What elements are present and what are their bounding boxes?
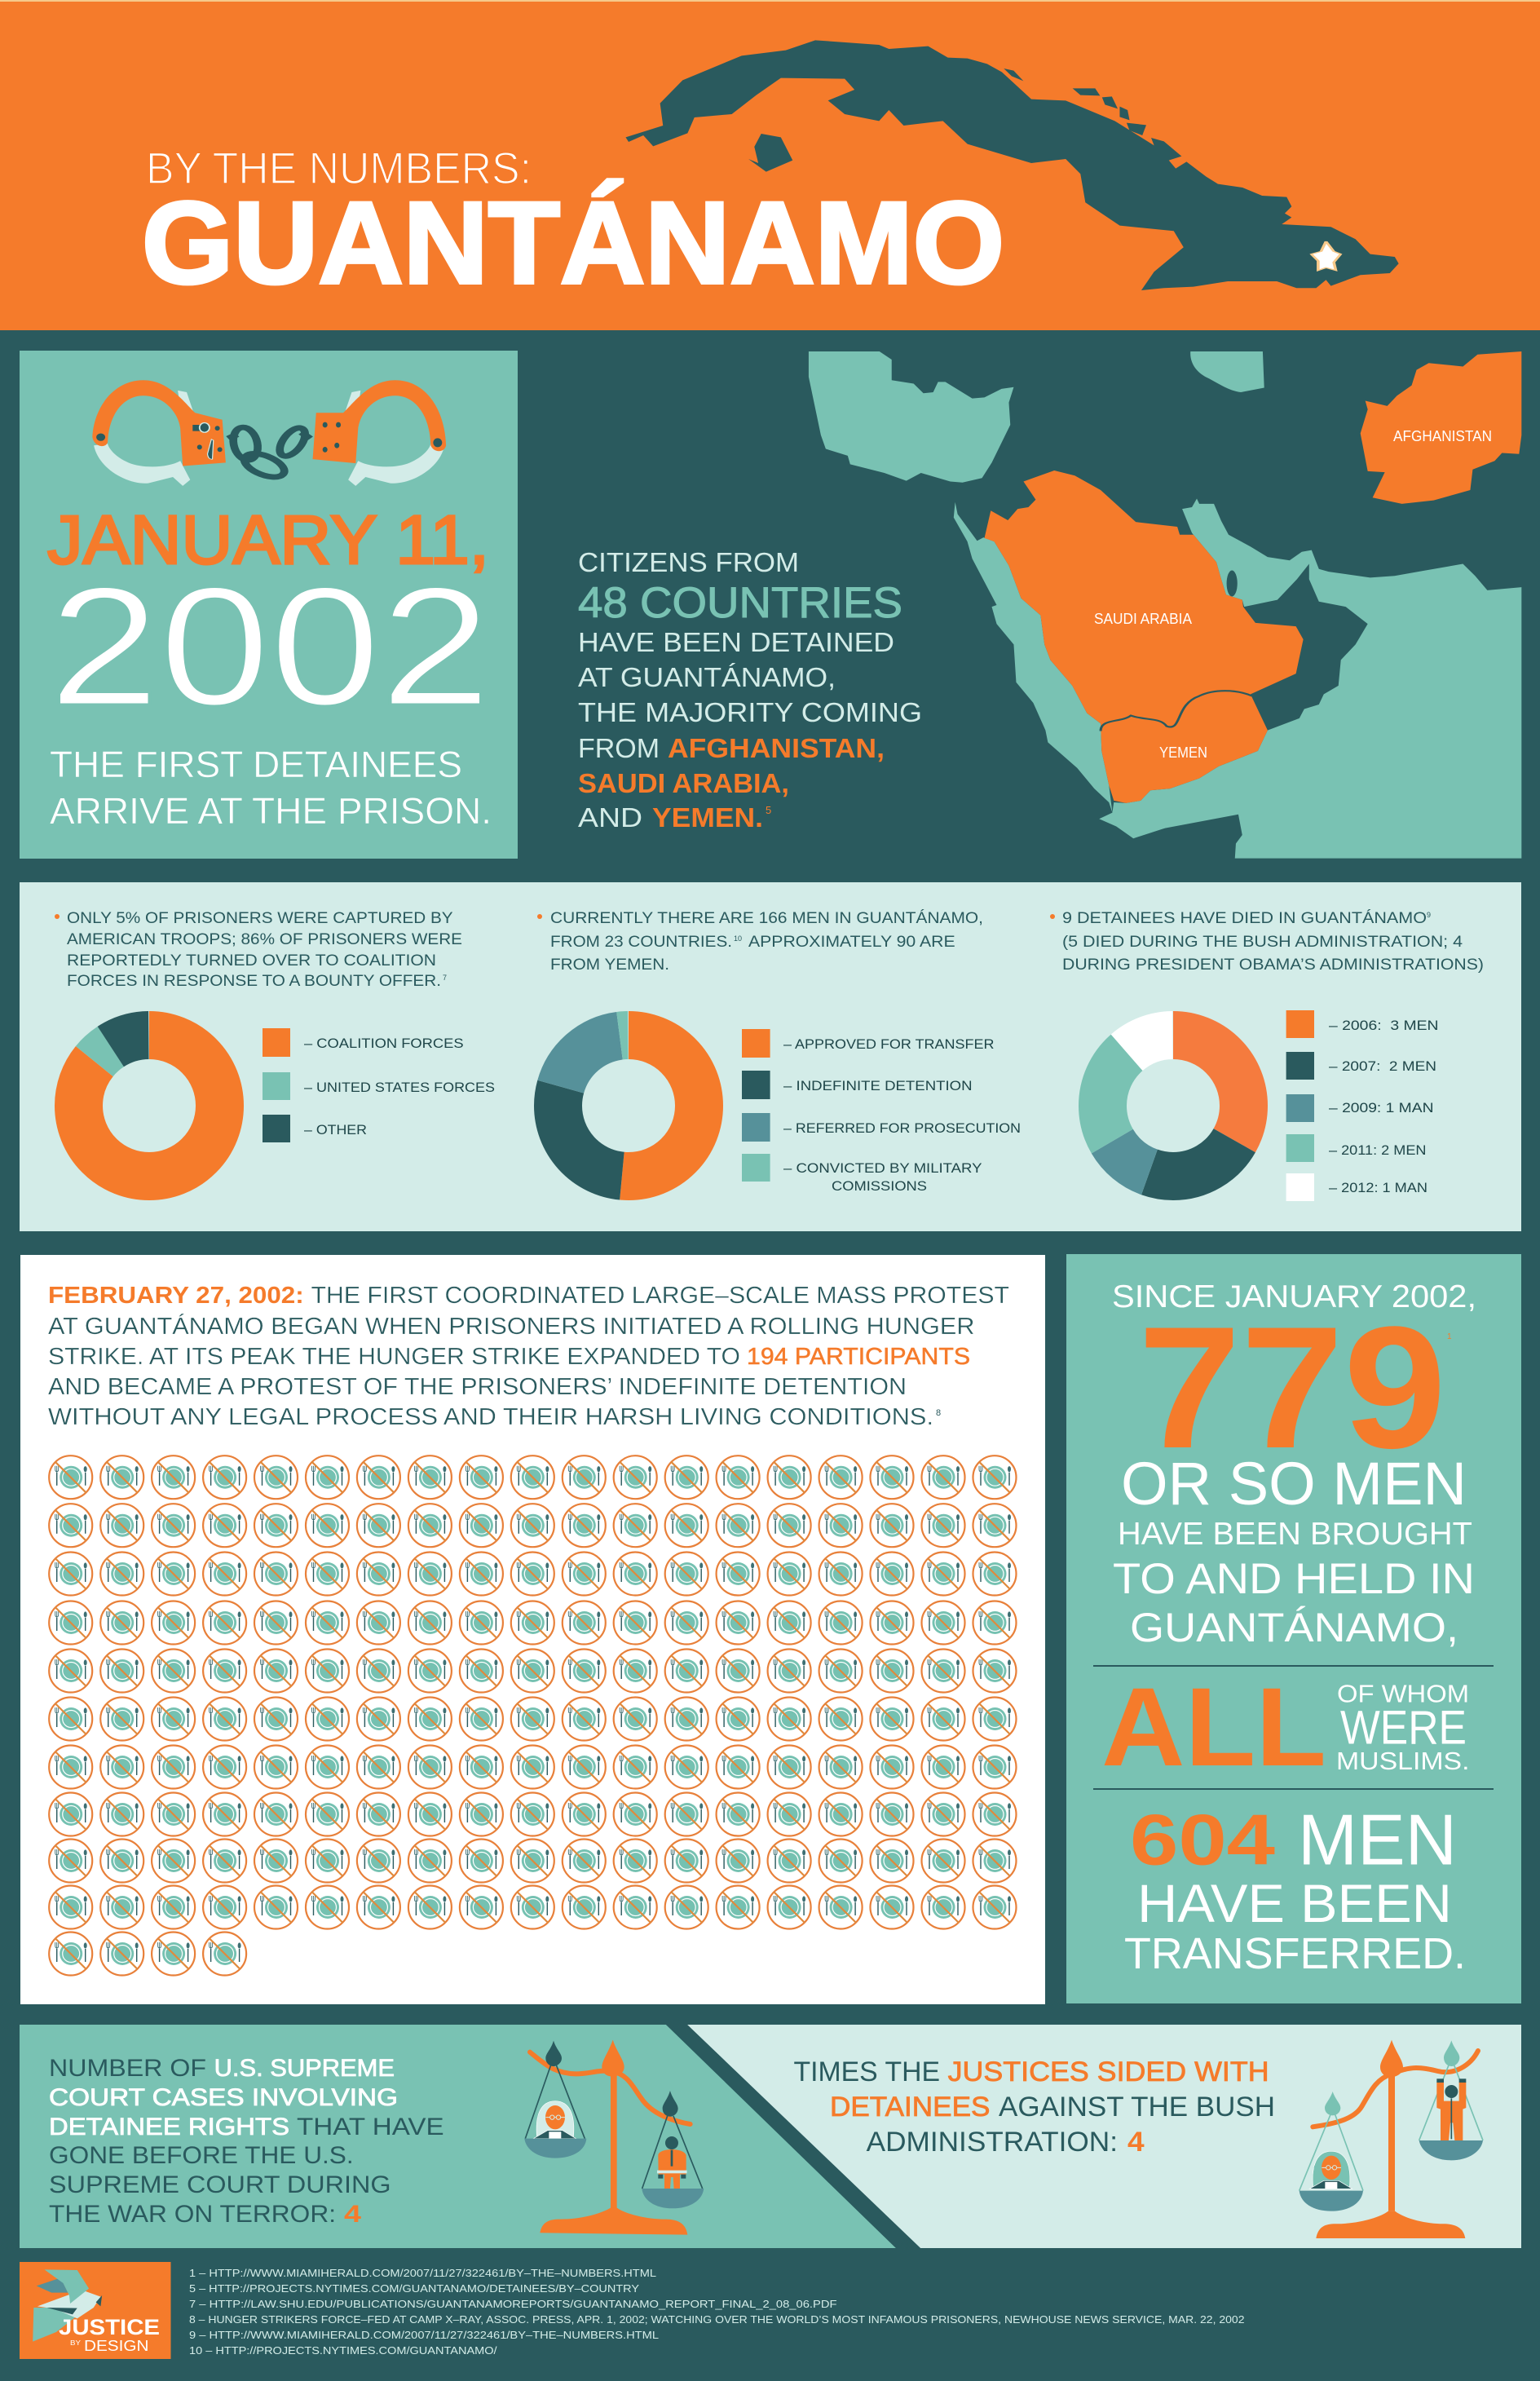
text: hunger strike description: AT GUANTÁNAMO BEGAN WHEN PRISONERS INITIATED A ROLLING HUNGER [48, 1314, 975, 1340]
text: number of Supreme Court cases: COURT CASES INVOLVING [49, 2084, 398, 2111]
text: all of whom were Muslims [1101, 1665, 1469, 1790]
text: capture statistics: FORCES IN RESPONSE TO A BOUNTY OFFER. [67, 972, 441, 990]
text: number of Supreme Court cases: GONE BEFORE THE U.S. [49, 2142, 354, 2169]
legend: deaths by year: – 2009: 1 MAN [1329, 1100, 1433, 1115]
text block: citizens from 48 countries: HAVE BEEN DETAINED [578, 628, 894, 658]
text: capture statistics: REPORTEDLY TURNED OVER TO COALITION [67, 952, 436, 970]
text: current prisoners: FROM 23 COUNTRIES. [550, 933, 732, 951]
text: hunger strike description: 194 PARTICIPANTS [747, 1344, 970, 1370]
text block: citizens from 48 countries: SAUDI ARABIA, [578, 769, 789, 799]
source references: 9 – HTTP://WWW.MIAMIHERALD.COM/2007/11/27/322461/BY–THE–NUMBERS.HTML [189, 2330, 659, 2341]
text: deaths: (5 DIED DURING THE BUSH ADMINISTRATION; 4 [1062, 933, 1463, 951]
text: since January 2002: SINCE JANUARY 2002, [1112, 1279, 1476, 1314]
text: number of Supreme Court cases: DETAINEE RIGHTS [49, 2114, 289, 2140]
title: BY THE NUMBERS: [146, 143, 532, 193]
legend: captured by: – OTHER [304, 1122, 367, 1137]
text: hunger strike description: THE FIRST COORDINATED LARGE–SCALE MASS PROTEST [311, 1283, 1009, 1309]
legend: deaths by year: – 2012: 1 MAN [1329, 1180, 1427, 1195]
text: deaths [1050, 908, 1484, 974]
legend: current status: – CONVICTED BY MILITARY [783, 1160, 982, 1176]
caption [50, 744, 492, 832]
caption: ARRIVE AT THE PRISON. [50, 790, 492, 832]
divider [1093, 1665, 1494, 1667]
text: current prisoners: 10 [734, 934, 742, 943]
text: hunger strike description: AND BECAME A PROTEST OF THE PRISONERS’ INDEFINITE DETENTION [48, 1374, 907, 1400]
legend: current status: COMISSIONS [832, 1178, 927, 1194]
logo: Justice by Design [20, 2262, 171, 2359]
panel: 779 men [1066, 1254, 1521, 2003]
text: since January 2002: TO AND HELD IN [1113, 1555, 1475, 1603]
panel: first detainees arrive [20, 351, 518, 859]
logo: Justice by Design: BY [70, 2339, 82, 2347]
text: number of Supreme Court cases [49, 2055, 444, 2228]
text: number of Supreme Court cases: U.S. SUPREME [214, 2055, 395, 2082]
legend: current status: – REFERRED FOR PROSECUTION [783, 1120, 1021, 1136]
text: hunger strike description [48, 1283, 1009, 1430]
header banner [0, 0, 1540, 330]
donut chart: deaths by year [1102, 1036, 1244, 1176]
text: current prisoners: FROM YEMEN. [550, 956, 669, 974]
text: since January 2002: 779 [1138, 1291, 1446, 1485]
text: 604 men transferred: 604 [1130, 1800, 1275, 1880]
source references: 8 – HUNGER STRIKERS FORCE–FED AT CAMP X–RAY, ASSOC. PRESS, APR. 1, 2002; WATCHING OVER THE WORLD’S MOST INFAMOUS PRISONERS, NEWHOUSE NEWS SERVICE, MAR. 22, 2002 [189, 2314, 1245, 2326]
donut chart: captured by [78, 1036, 220, 1176]
legend: current status: – APPROVED FOR TRANSFER [783, 1036, 995, 1052]
legend: deaths by year: – 2011: 2 MEN [1329, 1142, 1427, 1158]
text: hunger strike description: STRIKE. AT ITS PEAK THE HUNGER STRIKE EXPANDED TO [48, 1344, 740, 1370]
legend: deaths by year: – 2007: 2 MEN [1329, 1058, 1436, 1074]
text block: citizens from 48 countries: 5 [766, 804, 771, 816]
text: since January 2002: GUANTÁNAMO, [1130, 1605, 1458, 1650]
legend: captured by: – UNITED STATES FORCES [304, 1080, 495, 1095]
text: since January 2002: HAVE BEEN BROUGHT [1118, 1517, 1472, 1552]
text block: citizens from 48 countries: 48 COUNTRIES [578, 579, 902, 627]
text: capture statistics: AMERICAN TROOPS; 86% OF PRISONERS WERE [67, 930, 462, 948]
legend: deaths by year [1286, 1010, 1438, 1201]
panel: justices sided with detainees [687, 2025, 1521, 2248]
text: since January 2002: OR SO MEN [1121, 1450, 1467, 1517]
map labels: YEMEN [1159, 744, 1207, 761]
text block: citizens from 48 countries: FROM [578, 734, 660, 764]
text: capture statistics [55, 909, 462, 990]
map labels: SAUDI ARABIA [1094, 610, 1193, 627]
legend: captured by: – COALITION FORCES [304, 1036, 464, 1051]
logo: Justice by Design: DESIGN [84, 2338, 148, 2354]
text: hunger strike description: WITHOUT ANY LEGAL PROCESS AND THEIR HARSH LIVING CONDITIONS. [48, 1404, 933, 1430]
text: deaths: 9 [1427, 911, 1431, 919]
source references: 5 – HTTP://PROJECTS.NYTIMES.COM/GUANTANAMO/DETAINEES/BY–COUNTRY [189, 2283, 640, 2295]
text block: citizens from 48 countries: AFGHANISTAN, [668, 734, 885, 764]
text: since January 2002: 1 [1447, 1332, 1452, 1341]
diagonal divider between court panels [666, 2025, 920, 2248]
text: times the justices sided: DETAINEES [830, 2092, 990, 2123]
text: times the justices sided: TIMES THE [794, 2056, 940, 2087]
date heading: JANUARY 11, [47, 501, 489, 578]
map labels [1094, 427, 1492, 761]
text: times the justices sided: JUSTICES SIDED WITH [948, 2056, 1269, 2087]
legend: deaths by year: – 2006: 3 MEN [1329, 1018, 1438, 1033]
text block: citizens from 48 countries [578, 548, 922, 833]
legend: current status [742, 1029, 1021, 1194]
text: all of whom were Muslims: OF WHOM [1337, 1680, 1469, 1707]
logo: Justice by Design: JUSTICE [59, 2315, 160, 2339]
source references: 1 – HTTP://WWW.MIAMIHERALD.COM/2007/11/27/322461/BY–THE–NUMBERS.HTML [189, 2268, 656, 2279]
text: times the justices sided: AGAINST THE BUSH [999, 2092, 1275, 2123]
icon: scales tipped toward the justice [1300, 2040, 1483, 2238]
text block: citizens from 48 countries: AND [578, 803, 642, 833]
text: 604 men transferred: MEN [1298, 1800, 1457, 1880]
text: hunger strike description: FEBRUARY 27, 2002: [48, 1283, 304, 1309]
text: times the justices sided: 4 [1127, 2127, 1145, 2158]
title: GUANTÁNAMO [142, 179, 1004, 308]
text: number of Supreme Court cases: SUPREME COURT DURING [49, 2171, 391, 2198]
text: times the justices sided [794, 2056, 1275, 2158]
map: Cuba with star [625, 40, 1399, 290]
legend: current status: – INDEFINITE DETENTION [783, 1078, 973, 1093]
text: capture statistics: ONLY 5% OF PRISONERS WERE CAPTURED BY [67, 909, 453, 927]
panel: Supreme Court cases [20, 2025, 896, 2248]
legend: captured by [263, 1028, 495, 1142]
text: capture statistics: 7 [443, 974, 447, 982]
text: number of Supreme Court cases: THAT HAVE [297, 2114, 444, 2140]
panel: statistics with donut charts [20, 882, 1521, 1231]
text: current prisoners [537, 908, 983, 974]
caption: THE FIRST DETAINEES [50, 744, 462, 785]
text block: citizens from 48 countries: AT GUANTÁNAMO, [578, 663, 836, 693]
text: times the justices sided: ADMINISTRATION: [867, 2127, 1118, 2158]
text: all of whom were Muslims: MUSLIMS. [1336, 1747, 1469, 1775]
donut chart: current status [558, 1036, 699, 1176]
map: Middle East [809, 351, 1521, 859]
text: number of Supreme Court cases: NUMBER OF [49, 2055, 206, 2082]
text: current prisoners: APPROXIMATELY 90 ARE [748, 933, 955, 951]
text: 604 men transferred [1124, 1800, 1466, 1978]
text block: citizens from 48 countries: YEMEN. [652, 803, 763, 833]
text: deaths: 9 DETAINEES HAVE DIED IN GUANTÁNAMO [1062, 908, 1427, 927]
date heading [47, 501, 491, 740]
map labels: AFGHANISTAN [1393, 427, 1492, 444]
text: deaths: DURING PRESIDENT OBAMA’S ADMINISTRATIONS) [1062, 956, 1484, 974]
panel: hunger strike [20, 1255, 1045, 2004]
text: 604 men transferred: HAVE BEEN [1137, 1873, 1452, 1933]
divider [1093, 1788, 1494, 1790]
text: hunger strike description: 8 [936, 1408, 941, 1418]
icon: handcuffs [92, 380, 446, 486]
source references: 7 – HTTP://LAW.SHU.EDU/PUBLICATIONS/GUANTANAMOREPORTS/GUANTANAMO_REPORT_FINAL_2_08_06.PDF [189, 2299, 837, 2310]
text: number of Supreme Court cases: THE WAR ON TERROR: [49, 2201, 336, 2228]
text: number of Supreme Court cases: 4 [344, 2201, 361, 2228]
text: 604 men transferred: TRANSFERRED. [1124, 1929, 1466, 1978]
text block: citizens from 48 countries: CITIZENS FROM [578, 548, 799, 578]
icon grid: 194 crossed-out plates [49, 1456, 1017, 1975]
icon: scales tipped toward the prisoner [524, 2040, 704, 2235]
text block: citizens from 48 countries: THE MAJORITY COMING [578, 698, 922, 728]
date heading: 2002 [49, 552, 491, 740]
text: current prisoners: CURRENTLY THERE ARE 166 MEN IN GUANTÁNAMO, [550, 908, 983, 927]
text: all of whom were Muslims: ALL [1101, 1665, 1326, 1790]
source references [189, 2268, 1245, 2357]
text: since January 2002 [1112, 1279, 1476, 1650]
text: all of whom were Muslims: WERE [1340, 1701, 1467, 1755]
source references: 10 – HTTP://PROJECTS.NYTIMES.COM/GUANTANAMO/ [189, 2345, 497, 2357]
